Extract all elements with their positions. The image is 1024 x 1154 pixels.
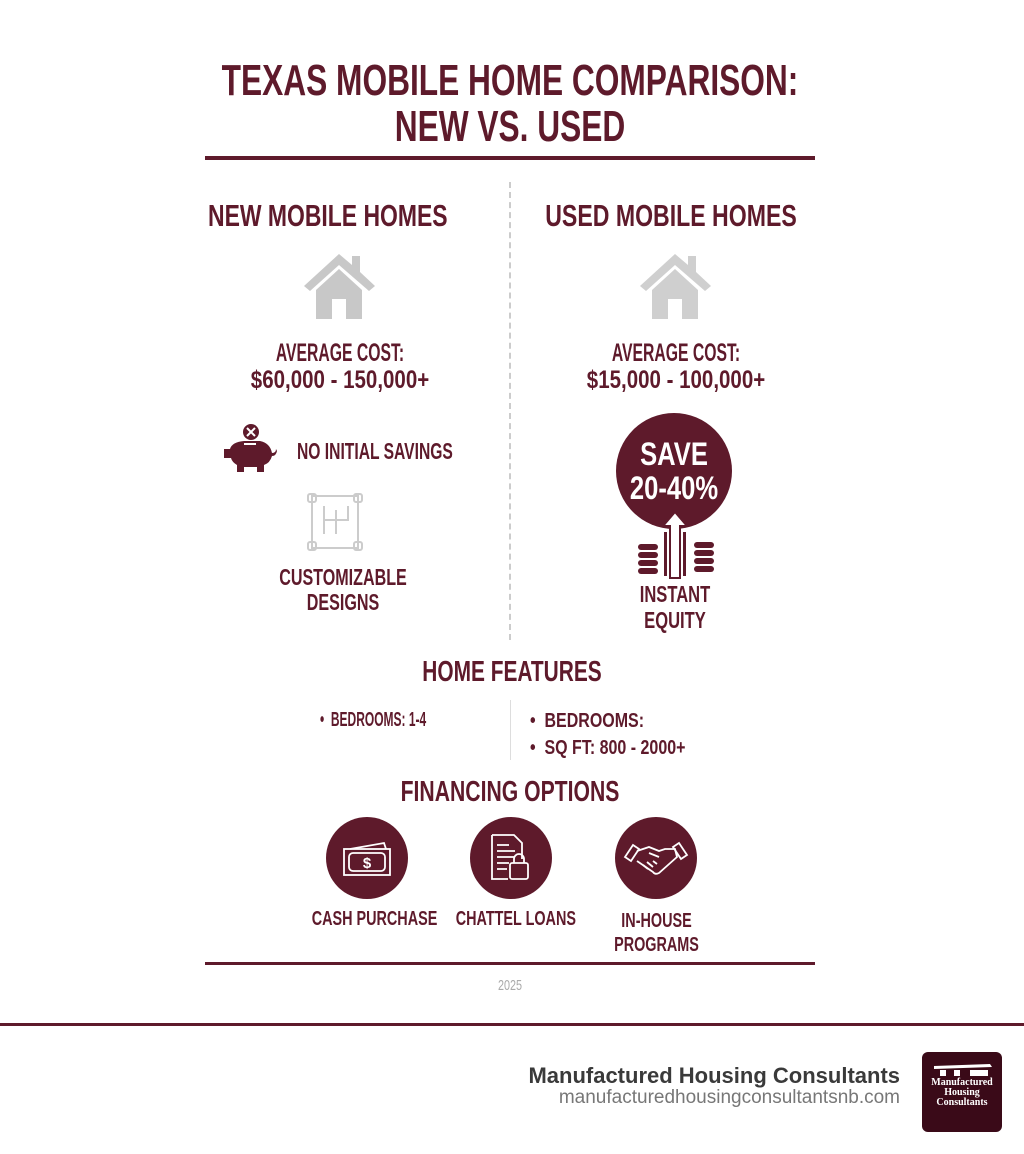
text: customizable designs: DESIGNS <box>307 589 379 615</box>
text: used average cost: AVERAGE COST: <box>612 339 740 367</box>
footer: logo: Manufactured <box>931 1077 993 1088</box>
text: used features: • BEDROOMS: <box>530 710 644 732</box>
footer: logo <box>922 1052 1002 1132</box>
icon: floorplan <box>307 493 363 551</box>
text: new average cost <box>251 339 429 394</box>
panel: used mobile homes: 20-40% <box>630 470 718 506</box>
title: NEW VS. USED <box>395 102 625 151</box>
option: cash purchase: $ <box>363 855 372 872</box>
option: chattel loans <box>456 817 576 930</box>
option: cash purchase: CASH PURCHASE <box>312 908 437 930</box>
icon: arrow and coins <box>638 514 714 579</box>
text: new features: • BEDROOMS: 1-4 <box>320 709 426 731</box>
footer: company name <box>528 1063 900 1108</box>
text: used features <box>530 710 685 759</box>
option: in-house programs: IN-HOUSE <box>621 910 692 932</box>
panel: used mobile homes: SAVE <box>640 436 708 472</box>
badge: save 20-40% <box>616 413 732 529</box>
heading: home features: HOME FEATURES <box>422 656 602 688</box>
text: customizable designs <box>279 564 407 615</box>
icon: house new <box>304 254 375 319</box>
icon: piggy bank <box>224 424 277 472</box>
footer: company name: Manufactured Housing Consultants <box>528 1063 900 1088</box>
text: used average cost: $15,000 - 100,000+ <box>587 366 765 394</box>
panel: new mobile homes <box>208 198 453 615</box>
panel: used mobile homes <box>545 198 797 633</box>
text: year: 2025 <box>498 977 522 994</box>
icon: house used <box>640 254 711 319</box>
footer: logo: Consultants <box>936 1097 988 1108</box>
text: instant equity: INSTANT <box>640 581 710 607</box>
text: used features: • SQ FT: 800 - 2000+ <box>530 737 685 759</box>
footer: logo: Housing <box>944 1087 980 1098</box>
section: financing options <box>312 776 699 956</box>
footer: company name: manufacturedhousingconsultantsnb.com <box>559 1087 900 1108</box>
option: cash purchase <box>312 817 437 930</box>
text: instant equity: EQUITY <box>644 607 706 633</box>
heading: new: NEW MOBILE HOMES <box>208 198 448 233</box>
title: TEXAS MOBILE HOME COMPARISON: <box>222 56 798 105</box>
text: customizable designs: CUSTOMIZABLE <box>279 564 407 590</box>
text: new average cost: $60,000 - 150,000+ <box>251 366 429 394</box>
option: in-house programs: PROGRAMS <box>614 934 699 956</box>
option: in-house programs <box>614 817 699 956</box>
heading: used: USED MOBILE HOMES <box>545 198 797 233</box>
section: home features <box>320 656 685 760</box>
heading: financing: FINANCING OPTIONS <box>401 776 619 808</box>
title <box>222 56 798 151</box>
text: instant equity <box>640 581 710 633</box>
text: new average cost: AVERAGE COST: <box>276 339 404 367</box>
option: chattel loans: CHATTEL LOANS <box>456 908 576 930</box>
text: used average cost <box>587 339 765 394</box>
text: no initial savings: NO INITIAL SAVINGS <box>297 438 453 464</box>
